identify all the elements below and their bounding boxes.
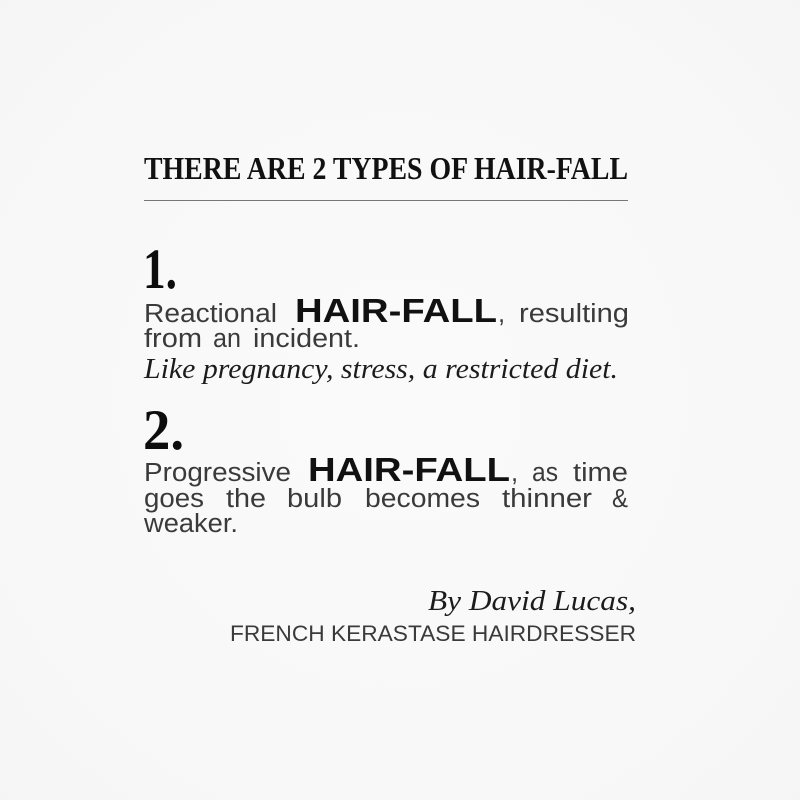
item 2 description: weaker. [143, 510, 238, 538]
item 2 description: goes [144, 485, 204, 513]
item 2 description: Progressive [144, 459, 291, 487]
title: THERE ARE 2 TYPES OF HAIR-FALL [144, 150, 628, 186]
item 2 [143, 399, 628, 538]
item 2 description: the [226, 485, 266, 513]
item 2 description: thinner [502, 485, 593, 513]
item 2 description: HAIR-FALL [308, 451, 510, 488]
item 1 [143, 238, 629, 385]
item 2 description: becomes [365, 485, 480, 513]
item 1 description: resulting [519, 300, 629, 328]
item 1 description: HAIR-FALL [295, 292, 497, 329]
item 2 description: & [612, 485, 628, 513]
item 1 description: Reactional [144, 300, 277, 328]
item 2 description: as [532, 459, 558, 487]
item 1 description: incident. [253, 325, 360, 353]
item 1 description [144, 292, 629, 353]
attribution [230, 585, 636, 646]
author name: By David Lucas, [428, 585, 636, 617]
item 2 description [143, 451, 628, 538]
item 2 description: bulb [287, 485, 342, 513]
number 2: 2. [143, 399, 184, 462]
item 1 description: an [213, 325, 241, 353]
item 1 description: , [498, 300, 505, 328]
item 2 description: , [511, 459, 518, 487]
number 1: 1. [143, 238, 177, 301]
author role: FRENCH KERASTASE HAIRDRESSER [230, 621, 636, 646]
item 2 description: time [573, 459, 628, 487]
item 1 examples: Like pregnancy, stress, a restricted diet. [143, 353, 618, 385]
item 1 description: from [144, 325, 202, 353]
